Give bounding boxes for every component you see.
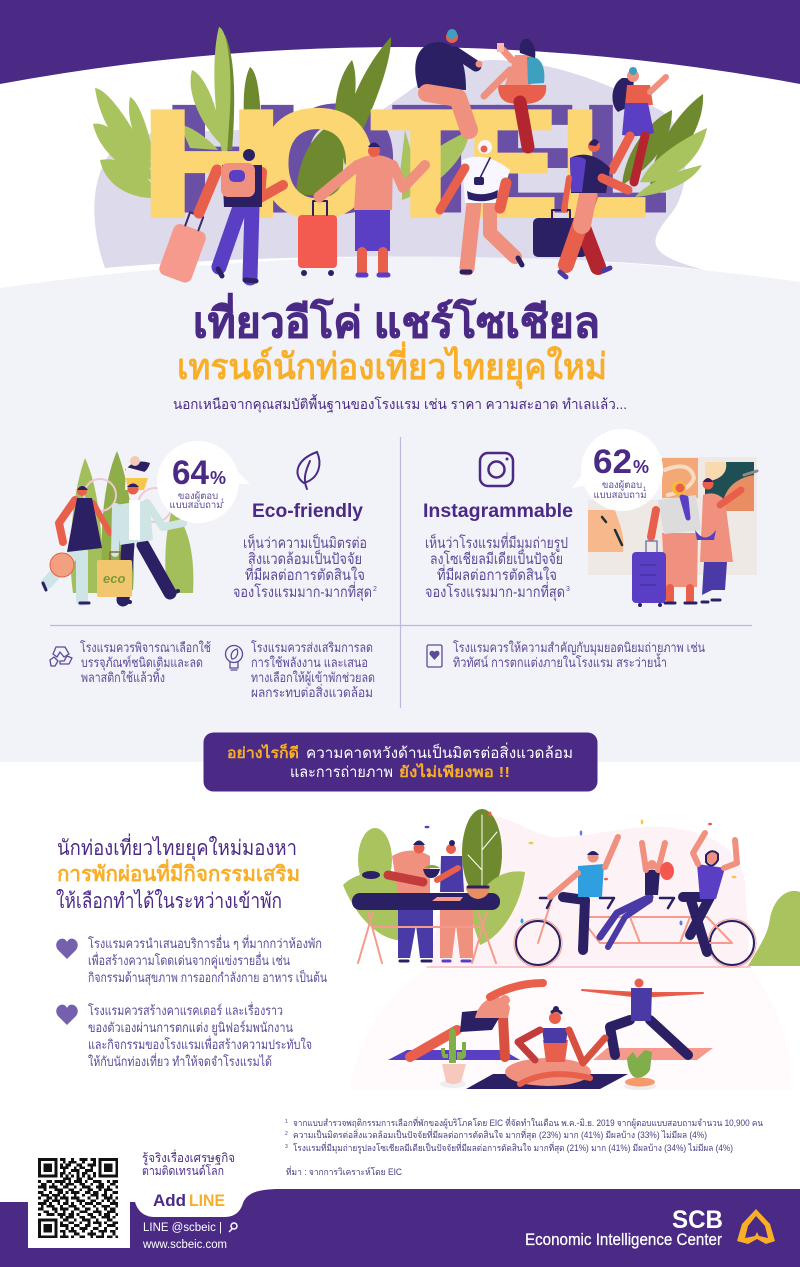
- heading: Eco-friendly: Eco-friendly: [252, 501, 363, 522]
- potted cactus: [440, 1028, 466, 1088]
- speech bubble 64 percent: 1: [221, 499, 225, 505]
- yellow letters HOTEL: L: [560, 79, 648, 249]
- lavender content panel: [0, 256, 800, 762]
- shadow letters HOTEL: E: [488, 74, 579, 244]
- instagrammable body text: จองโรงแรมมาก-มากที่สุด: [425, 581, 565, 602]
- shadow letters HOTEL: [161, 74, 669, 244]
- bullet one with heart: [56, 935, 327, 986]
- title: เที่ยวอีโค่ แชร์โซเชียล: [193, 293, 600, 346]
- potted succulent: [624, 1050, 656, 1090]
- instagrammable body text: [425, 532, 570, 602]
- seated man on letters: [415, 29, 482, 130]
- shadow letters HOTEL: T: [392, 74, 501, 244]
- pink background blob: [430, 815, 750, 967]
- bullet two with heart: [56, 1002, 312, 1069]
- yellow letters HOTEL: O: [258, 79, 377, 249]
- icon: eco bulb: [226, 646, 242, 670]
- label on eco bag: eco: [103, 571, 125, 586]
- eco tip one: พลาสติกใช้แล้วทิ้ง: [81, 668, 165, 685]
- eco body text: เห็นว่าความเป็นมิตรต่อ: [243, 533, 367, 552]
- eco tip two: ทางเลือกให้ผู้เข้าพักช่วยลด: [251, 670, 375, 686]
- instagrammable tip: [453, 640, 705, 670]
- LINE prompt: [142, 1149, 235, 1210]
- yellow letters HOTEL: [140, 79, 648, 249]
- eco tip two: [251, 640, 375, 700]
- eco body text: ที่มีผลต่อการตัดสินใจ: [245, 564, 365, 584]
- top purple header band: [0, 0, 800, 84]
- icon: leaf: [297, 452, 319, 489]
- speech bubble 62 percent: %: [633, 457, 649, 477]
- speech bubble 62 percent: 1: [643, 487, 647, 493]
- panel: instagrammable: [423, 429, 757, 670]
- footnotes: ที่มา : จากการวิเคราะห์โดย EIC: [286, 1165, 402, 1177]
- icon: SCB bell logo: [737, 1209, 775, 1244]
- speech bubble 64 percent: 64: [172, 454, 209, 492]
- subtitle: เทรนด์นักท่องเที่ยวไทยยุคใหม่: [177, 341, 607, 390]
- traveller with backpack and pink suitcase: [157, 149, 283, 284]
- icon: instagram: [480, 453, 513, 486]
- eco tip two: การใช้พลังงาน และเสนอ: [251, 655, 368, 670]
- instagrammable body text: ที่มีผลต่อการตัดสินใจ: [437, 564, 557, 584]
- LINE prompt: รู้จริงเรื่องเศรษฐกิจ: [142, 1149, 235, 1166]
- callout banner: ความคาดหวังด้านเป็นมิตรต่อสิ่งแวดล้อม: [306, 742, 573, 762]
- illustration: activities: [343, 809, 800, 1090]
- LINE prompt: LINE: [189, 1191, 225, 1210]
- corner plant: [748, 891, 800, 966]
- footnotes: ความเป็นมิตรต่อสิ่งแวดล้อมเป็นปัจจัยที่มีผลต่อการตัดสินใจ มากที่สุด (23%) มาก (41%) มีผลบ้าง (33%) ไม่มีผล (4%): [293, 1128, 707, 1141]
- eco tip one: โรงแรมควรพิจารณาเลือกใช้: [80, 640, 211, 655]
- callout banner: ยังไม่เพียงพอ !!: [399, 762, 510, 781]
- footer purple band: [0, 1189, 800, 1267]
- traveller with camera: [440, 140, 522, 272]
- LINE prompt: Add: [153, 1191, 186, 1210]
- confetti: [424, 812, 736, 926]
- hero illustration: HOTEL letters with travellers: [93, 27, 707, 284]
- eco tip two: โรงแรมควรส่งเสริมการลด: [251, 640, 373, 655]
- speech bubble 62 percent: [572, 429, 663, 511]
- eco body text: สิ่งแวดล้อมเป็นปัจจัย: [248, 548, 362, 568]
- instagrammable body text: ลงโซเชียลมีเดียเป็นปัจจัย: [430, 549, 563, 568]
- SCB wordmark: [525, 1206, 723, 1249]
- speech bubble 64 percent: แบบสอบถาม: [169, 500, 223, 511]
- speech bubble 64 percent: [157, 441, 250, 523]
- shadow letters HOTEL: O: [279, 74, 398, 244]
- QR code card: [28, 1148, 130, 1248]
- eco tip one: [80, 640, 211, 685]
- callout banner: [204, 732, 598, 792]
- bullet two with heart: โรงแรมควรสร้างคาแรคเตอร์ และเรื่องราว: [88, 1002, 283, 1018]
- instagrammable body text: เห็นว่าโรงแรมที่มีมุมถ่ายรูป: [425, 532, 568, 553]
- bullet two with heart: และกิจกรรมของโรงแรมเพื่อสร้างความประทับใจ: [88, 1036, 312, 1052]
- speech bubble 64 percent: %: [210, 468, 226, 488]
- tandem bicycle with three riders: [427, 833, 756, 967]
- yoga group: [388, 978, 713, 1089]
- LINE handle and website: [142, 1222, 237, 1251]
- heading: Instagrammable: Instagrammable: [423, 501, 573, 522]
- soft yoga backdrop: [350, 967, 791, 1090]
- cooking couple: [343, 809, 525, 963]
- footnotes: 2: [285, 1131, 288, 1137]
- callout banner: อย่างไรก็ดี: [227, 743, 299, 762]
- footnotes: จากแบบสำรวจพฤติกรรมการเลือกที่พักของผู้บริโภคโดย EIC ที่จัดทำในเดือน พ.ค.-มิ.ย. 2019 จากผู้ตอบแบบสอบถามจำนวน 10,900 คน: [293, 1116, 763, 1129]
- heading: activities: ให้เลือกทำได้ในระหว่างเข้าพัก: [56, 889, 282, 913]
- speech bubble 64 percent: ของผู้ตอบ: [178, 491, 218, 502]
- SCB wordmark: Economic Intelligence Center: [525, 1230, 722, 1249]
- bullet two with heart: ของตัวเองผ่านการตกแต่ง ยูนิฟอร์มพนักงาน: [88, 1020, 293, 1036]
- panel dividers: [50, 437, 752, 708]
- footnotes: 1: [285, 1119, 288, 1125]
- callout banner: และการถ่ายภาพ: [290, 764, 393, 781]
- heading: activities: นักท่องเที่ยวไทยยุคใหม่มองหา: [57, 833, 297, 861]
- speech bubble 62 percent: 62: [593, 443, 632, 481]
- yellow letters HOTEL: E: [467, 79, 558, 249]
- SCB wordmark: SCB: [672, 1206, 723, 1234]
- traveller with navy suitcase: [533, 139, 628, 277]
- bullet one with heart: เพื่อสร้างความโดดเด่นจากคู่แข่งรายอื่น เช่น: [88, 952, 290, 969]
- instagrammable tip: โรงแรมควรให้ความสำคัญกับมุมยอดนิยมถ่ายภาพ เช่น: [453, 640, 705, 656]
- illustration: eco shoppers: [43, 451, 193, 603]
- shadow letters HOTEL: L: [581, 74, 669, 244]
- instagrammable tip: ทิวทัศน์ การตกแต่งภายในโรงแรม สระว่ายน้ำ: [453, 653, 667, 670]
- eco body text: 2: [373, 586, 377, 593]
- instagrammable body text: 3: [566, 586, 570, 593]
- speech bubble 62 percent: ของผู้ตอบ: [602, 480, 642, 491]
- intro text: นอกเหนือจากคุณสมบัติพื้นฐานของโรงแรม เช่น ราคา ความสะอาด ทำเลแล้ว...: [173, 394, 627, 413]
- footnotes: 3: [285, 1144, 288, 1150]
- yellow letters HOTEL: T: [371, 79, 480, 249]
- LINE handle and website: LINE @scbeic |: [143, 1222, 222, 1234]
- yellow letters HOTEL: H: [140, 79, 284, 249]
- eco body text: จองโรงแรมมาก-มากที่สุด: [233, 581, 372, 602]
- bullet two with heart: ให้กับนักท่องเที่ยว ทำให้จดจำโรงแรมได้: [88, 1053, 272, 1069]
- shadow letters HOTEL: H: [161, 74, 305, 244]
- heading: activities: [56, 833, 300, 913]
- footnotes: [285, 1116, 763, 1177]
- lavender background blob: [94, 60, 704, 270]
- bullet one with heart: โรงแรมควรนำเสนอบริการอื่น ๆ ที่มากกว่าห้องพัก: [88, 935, 322, 951]
- icon: phone with heart: [427, 645, 442, 667]
- tropical plants: [93, 27, 707, 215]
- LINE prompt: ตามติดเทรนด์โลก: [142, 1164, 224, 1178]
- illustration: couple in front of art: [588, 457, 757, 607]
- traveller with red suitcase: [298, 142, 425, 276]
- speech bubble 62 percent: แบบสอบถาม: [593, 490, 647, 501]
- bullet one with heart: กิจกรรมด้านสุขภาพ การออกกำลังกาย อาหาร เป็นต้น: [88, 968, 327, 986]
- footnotes: โรงแรมที่มีมุมถ่ายรูปลงโซเชียลมีเดียเป็นปัจจัยที่มีผลต่อการตัดสินใจ มากที่สุด (21%) มาก (41%) มีผลบ้าง (34%) ไม่มีผล (4%): [293, 1141, 733, 1154]
- standing woman on letter L: [612, 67, 666, 182]
- eco body text: [233, 533, 377, 602]
- icon: recycle: [50, 647, 72, 666]
- eco tip one: บรรจุภัณฑ์ชนิดเติมและลด: [81, 655, 203, 671]
- eco tip two: ผลกระทบต่อสิ่งแวดล้อม: [251, 684, 373, 700]
- panel: eco-friendly: [43, 441, 377, 700]
- LINE handle and website: www.scbeic.com: [142, 1239, 227, 1251]
- seated woman with cup and backpack: [484, 39, 546, 147]
- heading: activities: การพักผ่อนที่มีกิจกรรมเสริม: [57, 858, 300, 886]
